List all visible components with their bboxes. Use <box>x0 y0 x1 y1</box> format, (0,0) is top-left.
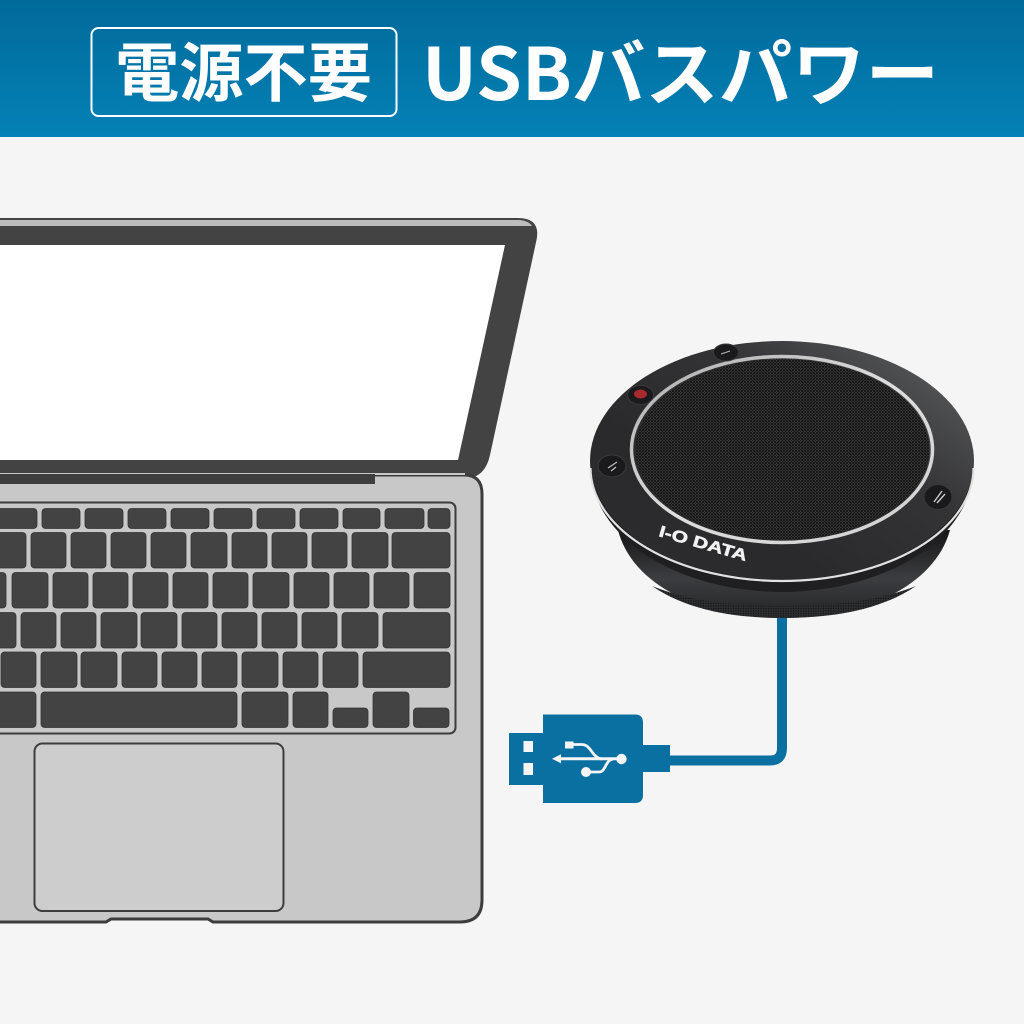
speaker top plate <box>590 341 974 581</box>
row 3 <box>0 612 16 648</box>
laptop screen <box>0 245 505 460</box>
row 1 <box>0 532 26 568</box>
USB cable <box>665 612 782 760</box>
row 0 <box>0 508 37 528</box>
laptop lid <box>0 218 537 478</box>
row 5 <box>0 692 36 728</box>
button: mic <box>924 484 952 510</box>
header banner <box>0 0 1024 137</box>
plug contact holes <box>524 741 533 775</box>
speaker outer silver rim <box>590 468 974 581</box>
laptop <box>0 218 537 922</box>
speakerphone <box>590 341 974 618</box>
button: volume <box>598 455 626 477</box>
heading: USBバスパワー: USBバスパワー <box>422 16 939 121</box>
badge: 電源不要 <box>92 28 396 116</box>
USB plug <box>509 714 670 803</box>
row 4 <box>1 652 36 688</box>
badge: 電源不要: 電源不要 <box>115 38 372 110</box>
trackpad <box>34 744 284 911</box>
speaker grille ring <box>632 356 932 542</box>
icon: USB trident symbol <box>552 742 627 777</box>
row 2 <box>0 572 6 608</box>
logo: I-O DATA: I-O DATA <box>657 524 750 565</box>
hinge strip <box>0 474 375 484</box>
button: top <box>714 344 738 361</box>
speaker lower body <box>618 530 950 618</box>
speaker mesh <box>636 359 930 540</box>
speaker lip under rim <box>591 468 973 592</box>
button: red mute <box>628 386 654 404</box>
laptop base <box>0 474 482 922</box>
keyboard <box>0 502 456 734</box>
